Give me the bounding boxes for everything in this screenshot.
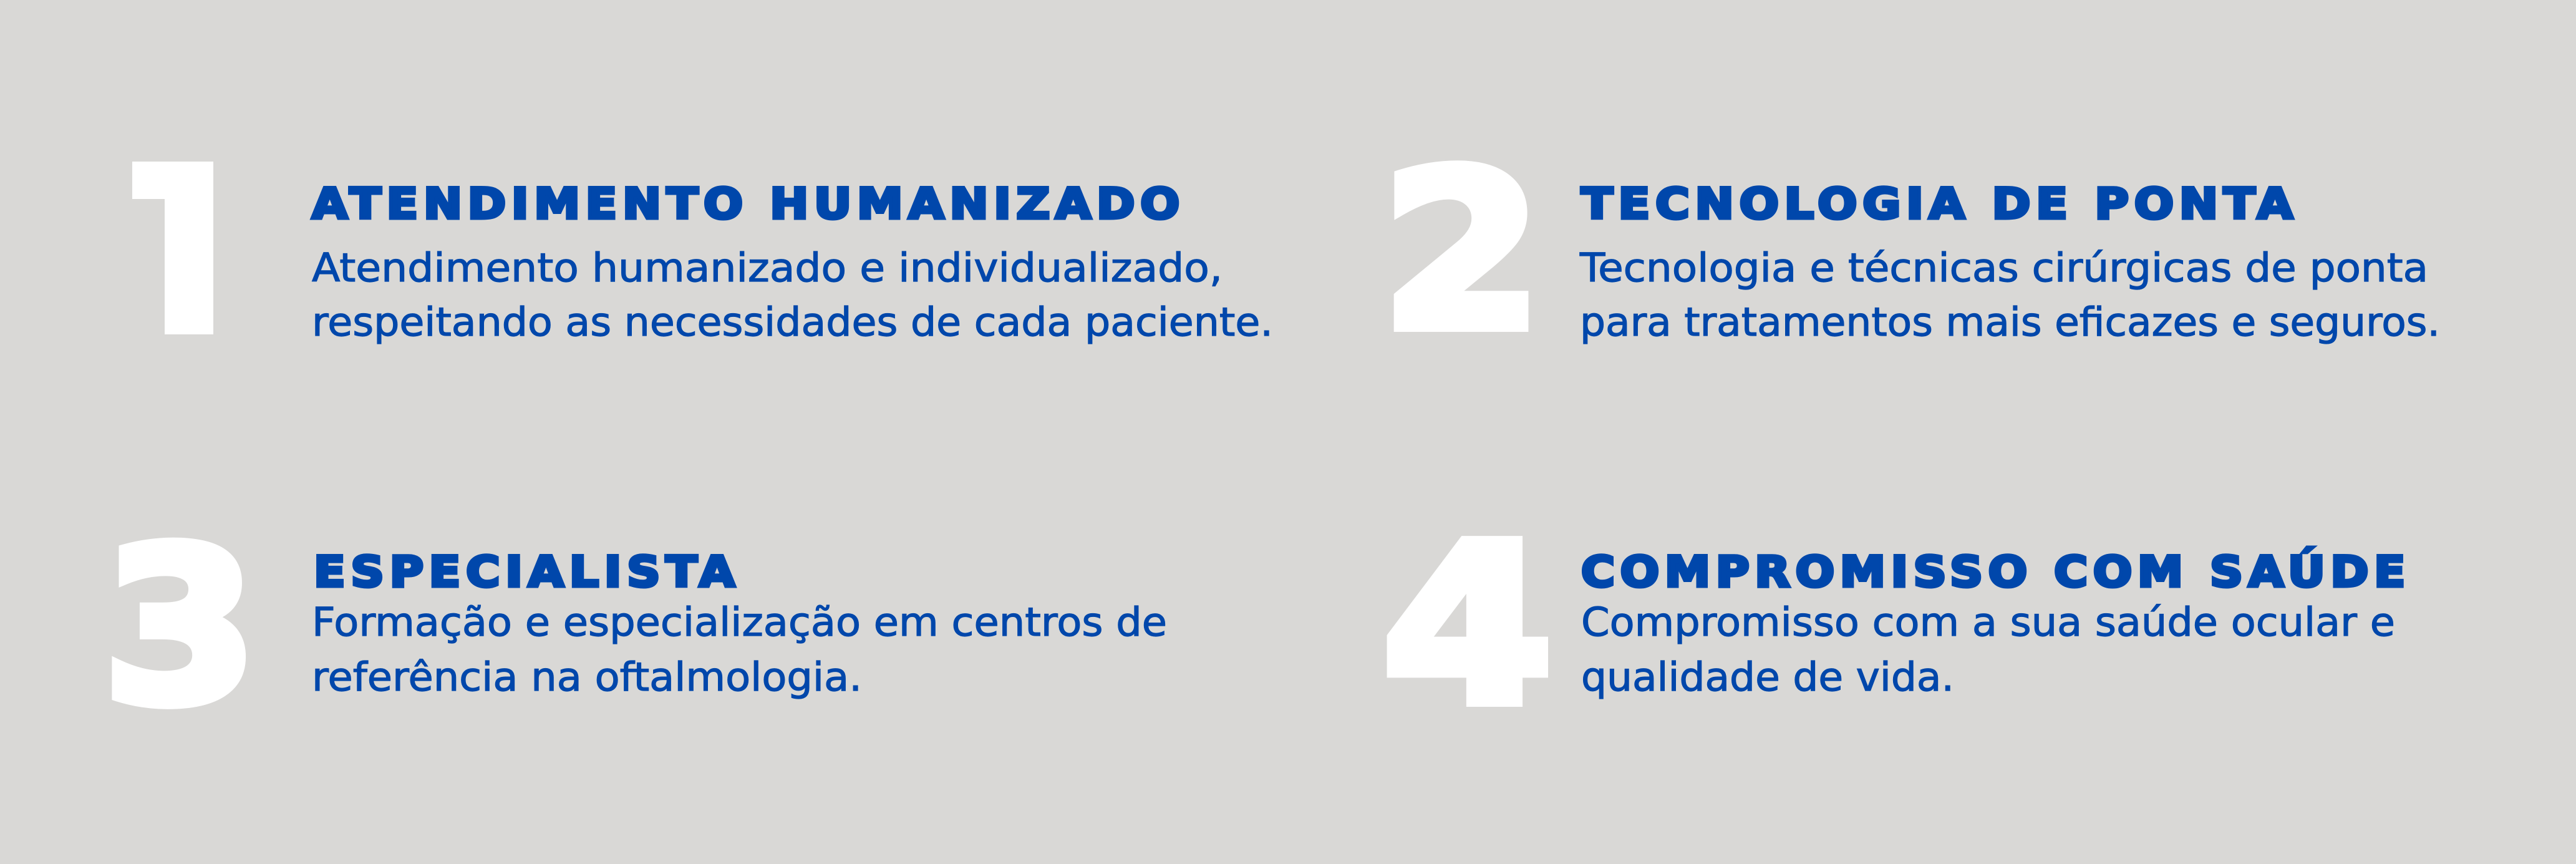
text block: atendimento description [312, 245, 1273, 345]
text block: tecnologia description [1579, 245, 2440, 345]
number 4: 4 [1382, 498, 1553, 753]
heading: atendimento humanizado: ATENDIMENTO HUMANIZADO [312, 180, 1185, 229]
heading: tecnologia de ponta: TECNOLOGIA DE PONTA [1581, 180, 2298, 229]
heading: especialista: ESPECIALISTA [314, 548, 740, 597]
panel: especialista [103, 504, 1167, 751]
panel: compromisso com saude [1382, 498, 2411, 753]
text block: tecnologia description: para tratamentos mais eficazes e seguros. [1580, 299, 2440, 345]
text block: atendimento description: respeitando as necessidades de cada paciente. [312, 299, 1273, 345]
text block: tecnologia description: Tecnologia e técnicas cirúrgicas de ponta [1579, 245, 2428, 291]
panel: atendimento humanizado [94, 109, 1273, 399]
text block: especialista description: referência na oftalmologia. [312, 654, 862, 700]
panel: tecnologia de ponta [1382, 126, 2440, 377]
number 1: 1 [94, 109, 268, 399]
number 2: 2 [1382, 126, 1542, 377]
number 3: 3 [103, 504, 258, 751]
text block: atendimento description: Atendimento humanizado e individualizado, [312, 245, 1223, 291]
text block: especialista description: Formação e especialização em centros de [312, 599, 1167, 645]
text block: compromisso description: qualidade de vida. [1581, 654, 1954, 700]
text block: especialista description [312, 599, 1167, 700]
text block: compromisso description [1581, 599, 2395, 700]
text block: compromisso description: Compromisso com a sua saúde ocular e [1581, 599, 2395, 645]
heading: compromisso com saude: COMPROMISSO COM SAÚDE [1581, 547, 2411, 597]
